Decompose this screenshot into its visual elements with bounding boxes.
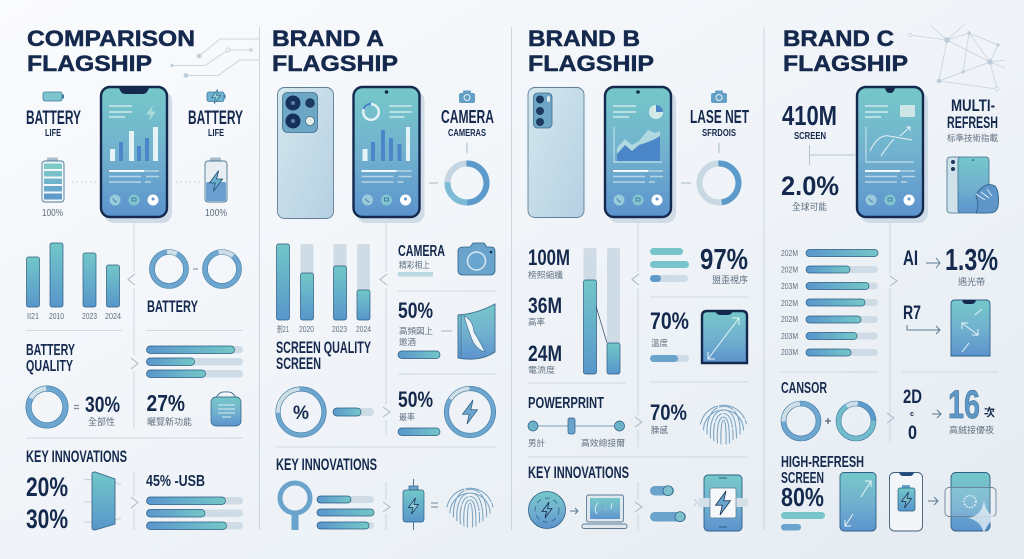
connector lines [429,143,467,183]
title: BRAND A [272,26,384,51]
icon: fingerprint [700,405,746,444]
sensor heading and donuts [781,380,880,445]
sensor heading and donuts: CANSOR [781,380,827,397]
27% stat: 27% [146,390,185,416]
camera stat: 精彩相上 [399,260,430,270]
charging battery icon [205,158,227,219]
powerprint slider: 男計 [528,438,545,448]
50% efficiency stat [398,387,440,436]
laser net label: SFRDOIS [702,128,736,139]
network decoration [908,24,1005,91]
camera stat: CAMERA [398,243,445,260]
phone with line chart [857,87,928,223]
icon: charging pad [528,492,566,528]
year bar chart: 2020 [299,324,314,334]
16 stat: 高銊接優夜 [949,425,995,435]
camera stat [398,243,445,276]
R7 label with arrow [903,303,940,334]
year bar chart: II21 [27,311,39,321]
chevron [128,274,135,285]
2D 0 values: 2D [903,387,922,408]
year bar chart: 2023 [82,311,97,321]
AI 1.3% stat: 1.3% [945,242,998,277]
megapixel bar list: 203M [781,281,798,291]
camera donut [448,164,486,202]
arrow [570,508,578,514]
high-refresh stat [781,454,864,530]
tall bars [584,248,620,374]
icon: bag [211,392,241,426]
high-refresh stat: 80% [781,482,824,512]
quality donut and 30% [22,382,120,432]
center divider [637,218,639,530]
right battery life label: LIFE [208,127,224,139]
phone with ring and bars [354,87,424,223]
multi-refresh label: MULTI- [951,96,995,115]
icon: fingerprint [447,488,493,527]
title: FLAGSHIP [272,51,398,76]
icon: magnifier [280,483,310,530]
arrow [932,410,941,418]
2.0% stat: 2.0% [781,171,839,201]
410M stat: 410M [782,100,837,131]
title: COMPARISON [27,26,195,51]
icon: laptop [582,495,627,528]
multi-refresh label [947,96,998,143]
chevron [383,407,390,417]
chevron [887,413,894,423]
connector [441,330,452,332]
usb stat and bars [146,473,243,530]
panel: brand a [272,26,503,530]
progress bar [333,408,374,416]
chevron [635,417,642,427]
battery quality heading [26,342,75,375]
phone tile with arrows [840,472,876,531]
chevron [890,276,897,286]
year bar chart: 2010 [49,311,64,321]
megapixel stats: 高率 [528,317,545,327]
phone with bar chart [101,87,172,223]
dividers [26,330,243,438]
phone with resize arrow [702,311,747,363]
percent donut: % [293,403,309,424]
left battery life label: LIFE [45,127,61,139]
connector lines [681,143,719,183]
title [272,26,398,76]
title: FLAGSHIP [27,51,152,76]
year bar chart [276,244,371,334]
70% stat [650,308,689,362]
bars [317,496,374,529]
2.0% stat: 全球可能 [792,201,827,212]
screen quality heading: SCREEN [276,354,321,373]
title [783,26,908,76]
16 stat: 次 [984,405,995,419]
70% stat: 溫度 [651,338,668,348]
97% stat [700,244,748,285]
97% stat: 97% [700,244,748,276]
usb stat and bars: 45% -USB [146,473,205,490]
dotted connectors [72,181,201,183]
megapixel bar list: 202M [781,248,798,258]
icon: camera [458,243,495,275]
key innovations heading: KEY INNOVATIONS [26,447,127,466]
year bar chart: 2024 [105,311,121,321]
stats 20% 30%: 20% [26,472,68,502]
center divider [385,218,387,530]
megapixel bar list: 203M [781,331,798,341]
multi-refresh label: 标準技術指載 [947,133,998,143]
16 stat: 16 [948,383,980,427]
high-refresh stat: HIGH-REFRESH [781,454,864,471]
screen quality heading [276,338,371,373]
megapixel bar list: 203M [781,347,798,357]
panel: brand c [781,24,1005,535]
50% stat: 邀酒 [399,337,416,347]
megapixel stats: 電流度 [528,365,556,375]
year bar chart [26,243,121,321]
chevron [131,497,138,508]
battery quality heading: BATTERY [26,342,75,359]
AI 1.3% stat [903,242,998,287]
circuit decoration [171,39,260,78]
screen quality heading: SCREEN QUALITY [276,338,371,357]
phone back with cameras [278,88,334,218]
left battery life label: BATTERY [26,108,81,129]
chevron [635,502,642,512]
arrow [928,497,938,505]
stats 20% 30%: 30% [26,504,68,534]
megapixel stats: 24M [528,341,562,366]
powerprint slider [528,395,626,448]
panel: comparison flagship [22,26,260,534]
right battery life label [188,89,243,139]
R7 label with arrow: R7 [903,303,921,324]
50% stat: 50% [398,298,433,323]
camera label: CAMERA [441,107,494,127]
right battery life label: BATTERY [188,108,243,129]
key innovations heading: KEY INNOVATIONS [528,463,629,482]
camera label [441,90,494,139]
27% stat [146,390,192,427]
stats 20% 30% [26,472,68,534]
laser net label: LASE NET [690,107,749,127]
quality donut and 30%: 30% [85,392,120,417]
50% stat: 高頻図上 [399,326,433,336]
icon: phone with charging card [698,475,748,531]
chevron [632,274,639,285]
full battery icon [42,158,64,219]
bolt donut [437,379,503,445]
chevron [694,499,697,506]
battery quality heading: QUALITY [26,358,73,375]
battery label: BATTERY [147,297,198,316]
phone with expand icon [951,300,990,356]
title: BRAND C [783,26,894,51]
megapixel stats: 榜照縮纖 [528,270,563,280]
50% efficiency stat: 50% [398,387,433,412]
70% fingerprint stat [650,400,687,435]
year bar chart: 2023 [332,324,347,334]
410M stat [782,100,837,142]
megapixel bar list: 202M [781,314,798,324]
percent donut [276,387,326,437]
50% efficiency stat: 最率 [399,412,415,422]
97% stat: 盟歪視序 [712,274,748,285]
megapixel stats: 36M [528,293,562,318]
title [27,26,195,76]
70% stat: 70% [650,308,689,335]
phone with area chart [605,87,676,223]
outlined phone with battery [890,472,922,531]
megapixel bar list [781,248,878,357]
quality donut and 30%: 全部性 [88,416,115,427]
AI 1.3% stat: AI [903,247,918,270]
year bar chart: 剖21 [277,324,289,334]
AI 1.3% stat: 遇光帶 [958,276,985,287]
phone with overlay frame [945,472,999,535]
panel: brand b [528,26,749,531]
2D 0 values: 0 [908,423,917,444]
powerprint slider: 高效總接爾 [581,438,626,448]
camera label: CAMERAS [448,128,486,139]
title [528,26,654,76]
connector [810,145,855,165]
center divider [889,218,891,442]
progress bars [146,346,243,378]
phone back with cameras [528,88,584,218]
center divider [133,218,135,530]
equals sign [431,503,438,507]
panel dividers [260,27,764,530]
megapixel stats [528,245,570,375]
key innovations heading: KEY INNOVATIONS [276,455,377,474]
laser donut [700,164,738,202]
70% fingerprint stat: 臊感 [651,425,668,435]
battery donuts [150,249,242,289]
powerprint slider: POWERPRINT [528,395,604,412]
laser net label [690,90,749,139]
megapixel bar list: 202M [781,264,798,274]
left battery life label [26,92,81,139]
70% fingerprint stat: 70% [650,400,687,425]
icon: phones with hand [947,157,999,213]
title: FLAGSHIP [783,51,908,76]
2D 0 values [903,387,922,444]
full battery icon: 100% [42,208,63,219]
toggles [650,486,686,522]
icon: curved tablet [84,472,121,530]
teal bars [650,248,689,282]
year bar chart: 2024 [356,324,371,334]
27% stat: 曬覽新功能 [147,416,192,427]
chevron [380,274,387,285]
icon: curved screen [458,304,495,359]
megapixel bar list: 202M [781,298,798,308]
title: FLAGSHIP [528,51,654,76]
410M stat: SCREEN [794,131,826,142]
2D 0 values: c [910,411,914,418]
title: BRAND B [528,26,640,51]
chevron [383,502,390,512]
icon: battery [403,479,424,530]
50% stat [398,298,440,358]
high-refresh stat: SCREEN [781,470,824,487]
chevron [131,358,138,369]
charging battery icon: 100% [205,208,227,219]
megapixel stats: 100M [528,245,570,270]
